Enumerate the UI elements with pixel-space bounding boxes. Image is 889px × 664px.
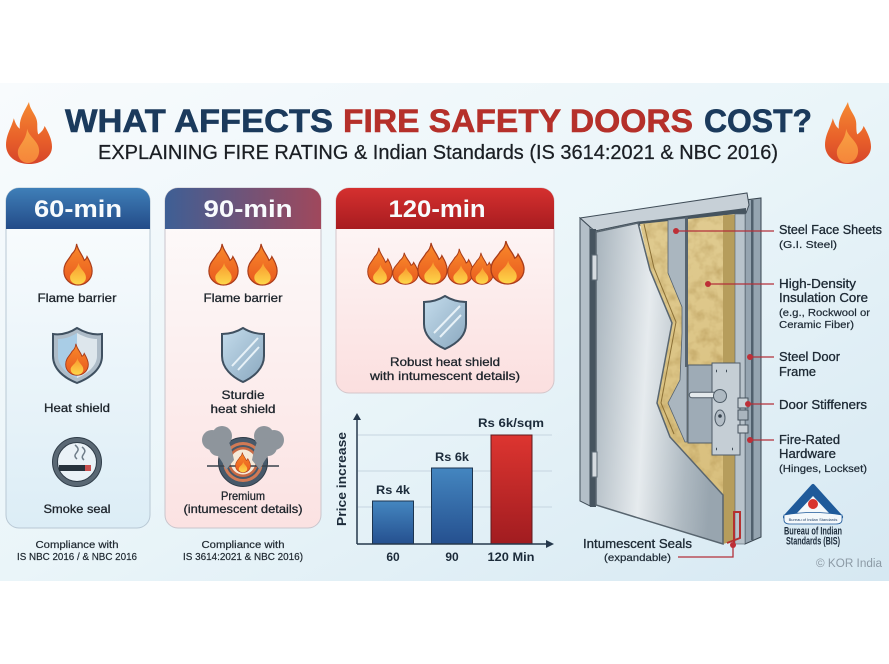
label: steel door frame: Steel Door <box>779 350 840 364</box>
value: Rs 6k/sqm: Rs 6k/sqm <box>478 416 544 430</box>
label: premium intumescent details: (intumescent details) <box>184 502 302 516</box>
compliance: 90-min: Compliance with <box>202 540 284 551</box>
compliance: 60-min <box>17 540 137 563</box>
door leaf <box>596 223 723 544</box>
icon: no smoking <box>52 438 102 486</box>
hardware <box>738 398 748 408</box>
label: insulation core <box>779 277 871 331</box>
heading: 90-min: 90-min <box>204 196 292 223</box>
icon: flame <box>64 244 92 285</box>
label: fire-rated hardware: (Hinges, Lockset) <box>779 463 867 475</box>
panel: 120-min <box>336 188 554 393</box>
category: 120 Min: 120 Min <box>488 550 534 564</box>
lock cylinder <box>715 410 725 426</box>
label: steel face sheets: Steel Face Sheets <box>779 223 882 237</box>
inner steel strip <box>735 214 745 544</box>
hinge: top <box>592 255 597 280</box>
panel: 90-min <box>165 188 321 528</box>
axes <box>357 418 547 544</box>
head of frame <box>580 193 749 231</box>
compliance: 90-min: IS 3614:2021 & NBC 2016) <box>183 552 303 563</box>
label: premium intumescent details <box>184 489 302 516</box>
hinge: bottom <box>592 452 597 477</box>
label: smoke seal: Smoke seal <box>44 502 110 516</box>
arrowhead: y axis <box>353 413 361 420</box>
title: COST? <box>704 103 812 139</box>
right frame <box>745 198 761 544</box>
title <box>65 103 812 139</box>
label: robust heat shield: with intumescent details) <box>369 369 520 383</box>
icon: robust shield <box>424 296 466 349</box>
credit: © KOR India <box>816 558 883 570</box>
compliance: 90-min <box>183 540 303 563</box>
arrowhead: x axis <box>546 540 554 548</box>
compliance: 60-min: IS NBC 2016 / & NBC 2016 <box>17 552 137 563</box>
title: FIRE SAFETY DOORS <box>343 103 693 139</box>
lock plate <box>712 363 740 455</box>
label: insulation core: Ceramic Fiber) <box>779 319 854 331</box>
label: flame barrier: Flame barrier <box>204 291 282 305</box>
label: sturdie heat shield <box>210 388 276 416</box>
bar: 90 <box>432 468 472 544</box>
label: fire-rated hardware <box>779 433 867 475</box>
insulation core <box>640 214 736 544</box>
label: intumescent seals: (expandable) <box>604 552 671 564</box>
title: WHAT AFFECTS <box>65 103 333 139</box>
icon: two flames <box>209 244 277 285</box>
logo: Bureau of Indian Standards <box>784 486 842 548</box>
lever handle <box>692 392 716 398</box>
centre steel panel <box>668 218 687 442</box>
label: steel door frame: Frame <box>779 365 816 379</box>
bar: 120 <box>491 435 532 544</box>
compliance: 60-min: Compliance with <box>36 540 118 551</box>
label: premium intumescent details: Premium <box>221 489 265 503</box>
label: heat shield: Heat shield <box>44 401 110 415</box>
subtitle: EXPLAINING FIRE RATING & Indian Standards (IS 3614:2021 & NBC 2016) <box>98 142 778 164</box>
lower panel <box>688 365 714 443</box>
category: 60: 60 <box>386 550 400 564</box>
left jamb <box>580 218 590 506</box>
page background <box>0 83 889 581</box>
bar: 60 <box>372 501 414 544</box>
label: steel face sheets <box>779 223 882 251</box>
value: Rs 4k: Rs 4k <box>376 483 410 497</box>
door cutaway illustration <box>580 193 761 545</box>
icon: right flame <box>825 102 871 164</box>
header: 90-min <box>165 188 321 229</box>
icon: intumescent seal with smoke <box>202 426 284 486</box>
label: fire-rated hardware: Fire-Rated <box>779 433 840 447</box>
label: sturdie heat shield: Sturdie <box>222 388 265 402</box>
label: door stiffeners: Door Stiffeners <box>779 398 867 412</box>
label: intumescent seals <box>583 537 692 564</box>
label: fire-rated hardware: Hardware <box>779 447 836 461</box>
icon: sturdie shield <box>222 328 264 382</box>
callout leaders <box>673 228 774 557</box>
label: steel door frame <box>779 350 840 379</box>
value: Rs 6k: Rs 6k <box>435 450 469 464</box>
label: insulation core: (e.g., Rockwool or <box>779 307 871 319</box>
bar chart: price increase <box>334 413 554 564</box>
logo: Bureau of Indian Standards: Bureau of Indian Standards <box>789 517 837 522</box>
icon: six flames <box>368 241 524 284</box>
header: 120-min <box>336 188 554 229</box>
logo: Bureau of Indian Standards: Standards (BIS) <box>786 536 840 548</box>
heading: 120-min: 120-min <box>388 196 486 223</box>
icon: heat shield with flame <box>53 328 102 383</box>
label: flame barrier: Flame barrier <box>38 291 116 305</box>
icon: left flame <box>6 102 52 164</box>
label: steel face sheets: (G.I. Steel) <box>779 239 837 251</box>
label: robust heat shield: Robust heat shield <box>390 355 500 369</box>
label: insulation core: Insulation Core <box>779 291 868 305</box>
label: insulation core: High-Density <box>779 277 857 291</box>
header: 60-min <box>6 188 150 229</box>
intumescent seal <box>727 512 740 545</box>
label: robust heat shield <box>369 355 520 383</box>
heading: 60-min: 60-min <box>34 196 122 223</box>
label: intumescent seals: Intumescent Seals <box>583 537 692 551</box>
panel: 60-min <box>6 188 150 528</box>
logo: Bureau of Indian Standards: Bureau of Indian <box>784 526 842 538</box>
label: sturdie heat shield: heat shield <box>210 402 276 416</box>
axis label: Price increase <box>334 432 349 526</box>
category: 90: 90 <box>445 550 459 564</box>
